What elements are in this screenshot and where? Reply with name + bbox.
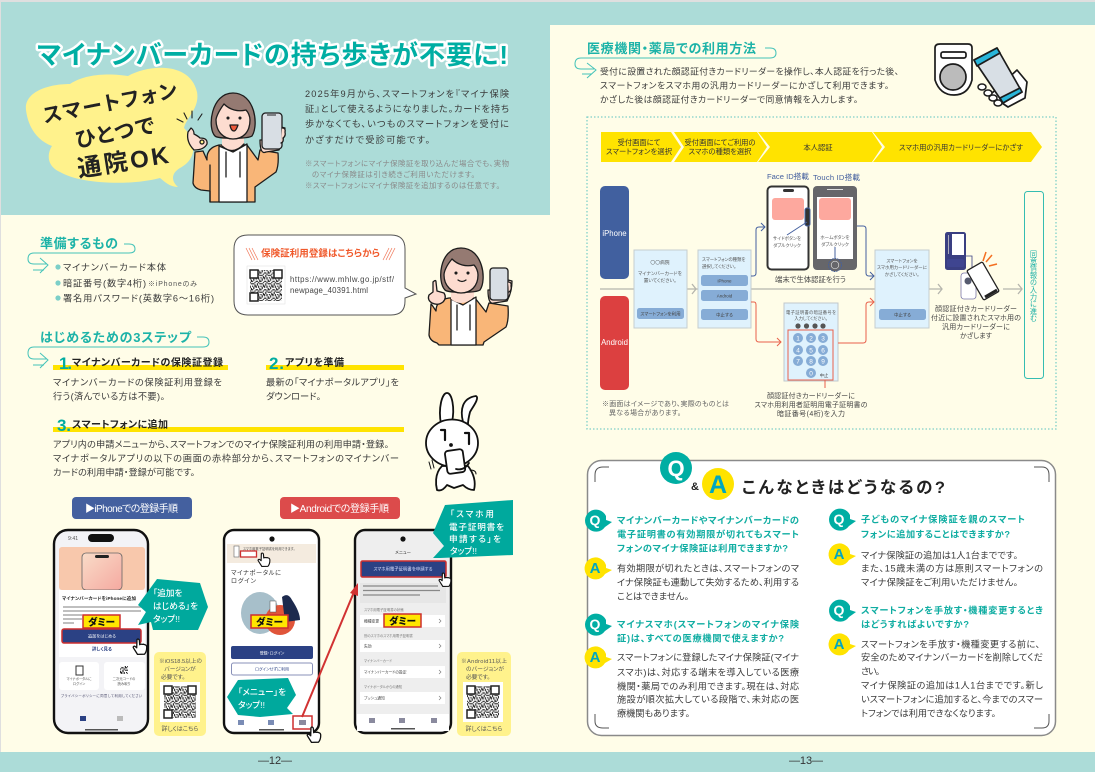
A4: スマートフォンを手放す・機種変更する前に、 xyxy=(861,638,1040,650)
A3 xyxy=(829,543,1043,588)
phone: Android login screen: 登録・ログイン xyxy=(260,650,285,656)
Q&A heading xyxy=(660,452,945,500)
phone: Touch ID: ダブルクリック xyxy=(821,241,849,248)
section heading: はじめるための3ステップ: はじめるための3ステップ xyxy=(40,330,192,345)
panel: Q&A xyxy=(585,452,1056,736)
flow header chevrons: 本人認証 xyxy=(803,143,833,152)
screen: PIN entry: 9 xyxy=(821,358,825,366)
phone: Face ID: ダブルクリック xyxy=(773,242,801,249)
icon: card reader and phone xyxy=(935,44,1027,107)
intro paragraph: how to use: かざした後は顔認証付きカードリーダーで同意情報を入力します。 xyxy=(600,94,858,104)
list: required items: 暗証番号(数字4桁) xyxy=(63,278,146,288)
screen: choose phone type xyxy=(698,250,751,328)
screen: PIN entry: 3 xyxy=(821,336,825,342)
button: iPhone手順 xyxy=(72,497,192,519)
Q1 xyxy=(585,510,799,554)
panel: usage flow xyxy=(587,117,1056,429)
screen: choose smartphone: スマートフォンを利用 xyxy=(640,310,681,318)
caption: PIN entry: スマホ用利用者証明用電子証明書の xyxy=(754,400,868,409)
intro paragraph: 2025年9月から、スマートフォンを『マイナ保険 xyxy=(305,88,509,99)
step 3 xyxy=(52,416,404,478)
caption: PIN entry: 暗証番号(4桁)を入力 xyxy=(777,409,845,418)
speech bubble: スマートフォンひとつで通院OK xyxy=(26,68,197,187)
callout: QR registration link: newpage_40391.html xyxy=(290,286,368,295)
box: 同意情報の入力に進む xyxy=(1024,192,1044,378)
list: required items: マイナンバーカード本体 xyxy=(62,262,166,272)
flow header chevrons xyxy=(601,132,1042,162)
phone: Android menu screen: マイナンバーカード xyxy=(364,658,392,663)
phone: Android menu screen: 機種変更 xyxy=(364,618,379,624)
Q2: 証)は、すべての医療機関で使えますか? xyxy=(617,632,784,644)
screen: choose smartphone: 置いてください。 xyxy=(644,277,676,284)
note: Android QR: ※Android11以上 xyxy=(461,657,507,665)
caption: reader: 付近に設置されたスマホ用の xyxy=(931,313,1021,322)
phone: Android menu screen: 失効 xyxy=(364,644,372,648)
section heading: 医療機関・薬局での利用方法 xyxy=(575,41,776,78)
callout: 追加をはじめるをタップ: はじめる」を xyxy=(153,601,198,611)
note: image disclaimer: 異なる場合があります。 xyxy=(609,408,681,417)
note: image disclaimer xyxy=(602,399,729,417)
note: image disclaimer: ※画面はイメージであり、実際のものとは xyxy=(602,399,729,408)
caption: reader: かざします xyxy=(960,331,992,340)
caption: reader: 汎用カードリーダーに xyxy=(942,322,1010,331)
intro paragraph: 歩かなくても、いつものスマートフォンを受付に xyxy=(305,118,509,129)
step 2: 最新の「マイナポータルアプリ」を xyxy=(266,378,399,388)
A4 xyxy=(829,633,1044,718)
flow header chevrons: スマホ用の汎用カードリーダーにかざす xyxy=(899,143,1023,152)
screen: PIN entry: 1 xyxy=(796,336,800,342)
Q4: Q xyxy=(834,602,845,618)
step 2: アプリを準備 xyxy=(285,356,344,369)
title: マイナンバーカードの持ち歩きが不要に! xyxy=(37,40,508,70)
arrow: to biometric xyxy=(751,223,765,276)
phone: iPhone screen: ダミー xyxy=(88,616,115,628)
list: required items xyxy=(55,262,214,304)
note: Android QR: のバージョンが xyxy=(466,665,504,673)
phone: Android menu screen: メニュー xyxy=(395,550,411,555)
Q3: 子どものマイナ保険証を親のスマート xyxy=(861,514,1025,524)
callout: スマホ用電子証明書を申請するをタップ: タップ!! xyxy=(450,545,477,556)
speech bubble: スマートフォンひとつで通院OK: スマートフォン xyxy=(41,80,179,128)
phone: iPhone screen: マイナポータルに xyxy=(66,676,92,681)
A4: 安全のためマイナンバーカードを削除してくだ xyxy=(861,652,1043,662)
phone: iPhone screen: 二次元コードの xyxy=(113,676,136,681)
step 2: 2. xyxy=(269,354,284,373)
phone: Touch ID xyxy=(813,186,857,272)
phone: Android menu screen: マイナンバーカードの設定 xyxy=(364,670,407,674)
callout: スマホ用電子証明書を申請するをタップ: 電子証明書を xyxy=(449,521,504,532)
A4: いスマートフォンに追加すると、今までのスマー xyxy=(861,694,1043,704)
Q3: Q xyxy=(834,511,845,527)
step 3: アプリ内の申請メニューから、スマートフォンでのマイナ保険証利用の利用申請・登録。 xyxy=(53,438,389,450)
screen: hold over reader: スマホ用カードリーダーに xyxy=(877,264,928,271)
phone: iPhone screen: 詳しく見る xyxy=(92,646,112,652)
screen: choose phone type: Android xyxy=(717,294,733,298)
callout: メニューをタップ xyxy=(227,678,296,717)
phone: Android login screen: ダミー xyxy=(256,616,283,628)
A2: スマートフォンに登録したマイナ保険証(マイナ xyxy=(617,652,799,662)
callout: メニューをタップ: タップ!! xyxy=(238,699,265,710)
caption: biometric: 端末で生体認証を行う xyxy=(775,275,846,284)
step 1: マイナンバーカードの保険証利用登録を xyxy=(52,376,222,388)
step 3: スマートフォンに追加 xyxy=(72,418,168,431)
Q&A heading: Q xyxy=(667,456,685,481)
phone: Android login screen: スマホ用電子証明書を利用できます。 xyxy=(243,546,295,551)
A2: 療機関もあります。 xyxy=(617,708,690,718)
screen: PIN entry: 電子証明書の暗証番号を xyxy=(786,309,836,316)
phone: iPhone screen: ログイン xyxy=(73,681,86,686)
notes xyxy=(305,159,510,190)
screen: PIN entry: 5 xyxy=(809,348,813,354)
phone: Android login screen xyxy=(224,530,319,733)
screen: PIN entry: 4 xyxy=(796,348,800,354)
phone: iPhone screen: プライバシーポリシーに同意して利用してください xyxy=(61,693,143,698)
notes: ※スマートフォンにマイナ保険証を追加するのは任意です。 xyxy=(305,181,500,190)
callout: 追加をはじめるをタップ: 「追加を xyxy=(153,587,182,598)
screen: PIN entry: 8 xyxy=(809,358,813,366)
section heading: 準備するもの xyxy=(28,236,135,273)
A4: トフォンでは利用できなくなります。 xyxy=(861,708,996,718)
flow header chevrons: スマートフォンを選択 xyxy=(606,147,673,156)
flow header chevrons: 受付画面にて xyxy=(618,138,660,147)
section heading: 準備するもの: 準備するもの xyxy=(40,236,118,251)
list: required items: 署名用パスワード(英数字6〜16桁) xyxy=(63,292,214,304)
screen: PIN entry: 中止 xyxy=(820,372,829,379)
arrow: to PIN xyxy=(751,302,781,346)
label: iPhone xyxy=(600,186,629,279)
label: iPhone: iPhone xyxy=(602,229,627,238)
label: Face ID: Face ID搭載 xyxy=(767,171,809,181)
flow header chevrons: スマホの種類を選択 xyxy=(688,147,752,156)
arrow: menu to card screen xyxy=(302,583,358,717)
intro paragraph: かざすだけで受診可能です。 xyxy=(305,134,430,145)
screen: choose phone type: 選択してください。 xyxy=(702,263,736,270)
phone: Android login screen: マイナポータルに xyxy=(231,569,281,577)
intro paragraph: 証』として使えるようになりました。カードを持ち xyxy=(305,103,509,114)
phone: Android menu screen: スマホ用電子証明書を申請する xyxy=(373,566,433,572)
phone: Android menu screen xyxy=(355,530,451,733)
phone: iPhone screen: 追加をはじめる xyxy=(88,632,116,640)
intro paragraph: how to use: 受付に設置された顔認証付きカードリーダーを操作し、本人認証を行った後、 xyxy=(600,66,899,76)
A2: 施設が順次拡大している段階で、未対応の医 xyxy=(617,694,799,704)
Q&A heading: こんなときはどうなるの? xyxy=(742,478,945,497)
step 3: 3. xyxy=(57,416,71,435)
Q4: スマートフォンを手放す・機種変更するとき xyxy=(861,604,1043,616)
A2: スマホ)は、対応する端末を導入している医療 xyxy=(617,666,799,678)
arrow: PIN to screen xyxy=(838,298,874,343)
A1 xyxy=(585,557,799,602)
Q&A heading: A xyxy=(709,471,727,499)
screen: hold over reader: スマートフォンを xyxy=(886,258,918,264)
note: iOS QR: バージョンが xyxy=(164,665,196,673)
button: Android手順: ▶Androidでの登録手順 xyxy=(290,502,389,515)
label: Android xyxy=(600,296,629,390)
callout: QR registration link: 保険証利用登録はこちらから xyxy=(261,248,380,260)
caption: PIN entry xyxy=(754,391,868,418)
A1: A xyxy=(590,560,601,577)
speech bubble: スマートフォンひとつで通院OK: ひとつで xyxy=(74,115,157,152)
callout: スマホ用電子証明書を申請するをタップ: 申請する」を xyxy=(449,533,501,544)
callout: メニューをタップ: 「メニュー」を xyxy=(238,687,286,697)
screen: PIN entry: 2 xyxy=(809,336,813,342)
flow header chevrons: 受付画面にてご利用の xyxy=(684,138,756,147)
list: required items: ※iPhoneのみ xyxy=(148,280,197,288)
step 2: ダウンロード。 xyxy=(266,390,321,402)
phone: Android menu screen: スマホ用電子証明書の状態 xyxy=(364,607,404,612)
A2 xyxy=(585,646,799,718)
phone: iPhone screen xyxy=(54,530,148,733)
phone: iPhone screen: 9:41 xyxy=(68,536,78,542)
callout: QR registration link xyxy=(234,235,416,315)
Q2 xyxy=(585,614,800,644)
box: 同意情報の入力に進む: 同意情報の入力に進む xyxy=(1030,250,1038,322)
Q4 xyxy=(829,600,1043,630)
notes: ※スマートフォンにマイナ保険証を取り込んだ場合でも、実物 xyxy=(305,159,510,168)
phone: iPhone screen: 読み取り xyxy=(118,681,130,686)
screen: choose smartphone: 〇〇病院 xyxy=(650,259,670,266)
screen: PIN entry: 7 xyxy=(796,358,800,366)
intro paragraph: how to use xyxy=(600,66,899,104)
note: Android QR: 詳しくはこちら xyxy=(466,725,503,733)
Q3: フォンに追加することはできますか? xyxy=(861,528,1010,540)
A4: さい。 xyxy=(861,666,880,676)
note: Android QR xyxy=(457,652,511,736)
step 3: カードの利用申請・登録が可能です。 xyxy=(53,466,195,478)
illustration: person pointing xyxy=(428,248,512,345)
hand: menu tap xyxy=(307,727,321,742)
screen: hold over reader: 中止する xyxy=(894,312,911,318)
A4: A xyxy=(834,636,845,653)
step 1: 行う(済んでいる方は不要)。 xyxy=(53,390,165,402)
section heading: はじめるための3ステップ xyxy=(28,330,209,368)
illustration: person holding smartphone, OK sign xyxy=(177,93,285,202)
note: iOS QR: 詳しくはこちら xyxy=(162,725,199,733)
Q1: Q xyxy=(590,512,601,528)
Q1: フォンのマイナ保険証は利用できますか? xyxy=(617,542,788,554)
A3: A xyxy=(834,546,845,563)
note: iOS QR xyxy=(154,652,206,736)
screen: choose phone type: iPhone xyxy=(717,278,732,284)
button: Android手順 xyxy=(280,497,400,519)
A2: A xyxy=(590,649,601,666)
step 2 xyxy=(266,354,404,402)
step 1: 1. xyxy=(59,354,72,373)
screen: choose smartphone: マイナンバーカードを xyxy=(638,270,682,277)
divider line with arrows xyxy=(600,284,1022,294)
callout: QR registration link: https://www.mhlw.go.jp/stf/ xyxy=(290,275,395,284)
A4: マイナ保険証の追加は1人1台までです。新し xyxy=(860,680,1044,690)
icon: reader with phone xyxy=(945,232,999,300)
phone: Android menu screen: プッシュ通知 xyxy=(364,696,385,700)
phone: Android menu screen: 別のスマホのスマホ用電子証明書 xyxy=(364,633,413,638)
phone: iPhone screen: マイナンバーカードをiPhoneに追加 xyxy=(62,595,136,602)
phone: Face ID xyxy=(768,186,810,270)
A1: ことはできません。 xyxy=(617,592,689,602)
phone: Android menu screen: ダミー xyxy=(389,616,416,628)
page number 12: ―12― xyxy=(258,755,292,767)
button: iPhone手順: ▶iPhoneでの登録手順 xyxy=(85,502,178,515)
caption: PIN entry: 顔認証付きカードリーダーに xyxy=(767,391,855,400)
A2: 機関・薬局でのみ利用できます。現在は、対応 xyxy=(617,680,799,692)
A3: マイナ保険証をご利用いただけません。 xyxy=(860,576,1018,588)
page number 13: ―13― xyxy=(789,755,823,767)
callout: 追加をはじめるをタップ: タップ!! xyxy=(153,613,180,624)
screen: hold over reader xyxy=(875,250,929,328)
callout: スマホ用電子証明書を申請するをタップ xyxy=(433,500,513,558)
screen: PIN entry xyxy=(784,303,838,388)
A3: また、15歳未満の方は原則スマートフォンの xyxy=(861,562,1043,574)
screen: PIN entry: 6 xyxy=(821,348,825,354)
arrow: Touch ID to screen xyxy=(857,226,874,280)
note: iOS QR: 必要です。 xyxy=(161,673,185,681)
Q1: 電子証明書の有効期限が切れてもスマート xyxy=(617,528,799,540)
illustration: rabbit mascot with phone xyxy=(426,393,478,490)
speech bubble: スマートフォンひとつで通院OK: 通院OK xyxy=(76,142,171,183)
notes: のマイナ保険証は引き続きご利用いただけます。 xyxy=(312,170,475,179)
step 3: マイナポータルアプリの以下の画面の赤枠部分から、スマートフォンのマイナンバー xyxy=(52,452,399,464)
callout: スマホ用電子証明書を申請するをタップ: 「スマホ用 xyxy=(450,509,494,519)
step 1 xyxy=(52,354,228,402)
screen: choose phone type: 中止する xyxy=(716,312,733,318)
Q3 xyxy=(829,509,1025,540)
A1: 有効期限が切れたときは、スマートフォンのマ xyxy=(617,562,799,574)
Q2: Q xyxy=(590,616,601,632)
phone: Android login screen: ログインせずに利用 xyxy=(255,666,289,672)
phone: Android menu screen: マイナポータルからの通知 xyxy=(364,684,403,689)
phone: Touch ID: ホームボタンを xyxy=(820,234,850,241)
callout: 追加をはじめるをタップ xyxy=(138,579,208,630)
screen: PIN entry: 入力してください。 xyxy=(794,315,828,322)
screen: PIN entry: 0 xyxy=(809,370,813,378)
phone: Face ID: サイドボタンを xyxy=(773,235,801,242)
screen: choose phone type: スマートフォンの種類を xyxy=(702,256,746,263)
Q4: はどうすればよいですか? xyxy=(861,618,969,630)
step 1: マイナンバーカードの保険証登録 xyxy=(72,356,223,369)
A3: マイナ保険証の追加は1人1台までです。 xyxy=(860,550,1018,560)
Q2: マイナスマホ(スマートフォンのマイナ保険 xyxy=(617,618,800,630)
caption: reader: 顔認証付きカードリーダー xyxy=(935,304,1017,313)
label: Android: Android xyxy=(601,338,628,347)
label: Touch ID: Touch ID搭載 xyxy=(813,172,860,182)
note: iOS QR: ※iOS18.5以上の xyxy=(159,657,202,665)
note: Android QR: 必要です。 xyxy=(466,673,490,681)
screen: choose smartphone xyxy=(634,250,687,328)
intro paragraph xyxy=(305,88,509,145)
Q&A heading: & xyxy=(691,481,699,493)
caption: reader xyxy=(931,304,1021,340)
screen: hold over reader: かざしてください。 xyxy=(885,271,919,278)
phone: Android login screen: ログイン xyxy=(231,577,256,585)
intro paragraph: how to use: スマートフォンをスマホ用の汎用カードリーダーにかざして利用できます。 xyxy=(600,80,889,90)
section heading: 医療機関・薬局での利用方法: 医療機関・薬局での利用方法 xyxy=(587,41,756,56)
Q1: マイナンバーカードやマイナンバーカードの xyxy=(617,516,799,526)
A1: イナ保険証も連動して失効するため、利用する xyxy=(617,576,799,588)
